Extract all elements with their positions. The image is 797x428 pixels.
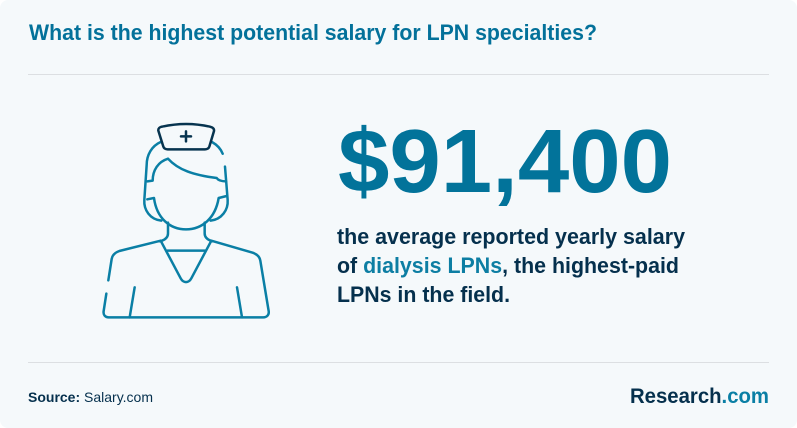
- logo: Research.com: Research.com: [630, 385, 769, 408]
- title: What is the highest potential salary for LPN specialties?: [29, 20, 597, 45]
- description text: LPNs in the field.: [337, 282, 510, 307]
- big salary number: $91,400: [338, 112, 672, 212]
- description text: the average reported yearly salary: [337, 224, 686, 249]
- nurse cap: [158, 124, 214, 149]
- source: Source: Salary.com: [28, 389, 153, 405]
- icon: nurse: [104, 124, 269, 317]
- description text: [337, 224, 686, 307]
- nurse hair and face: [104, 142, 269, 317]
- description text: of dialysis LPNs, the highest-paid: [337, 253, 679, 278]
